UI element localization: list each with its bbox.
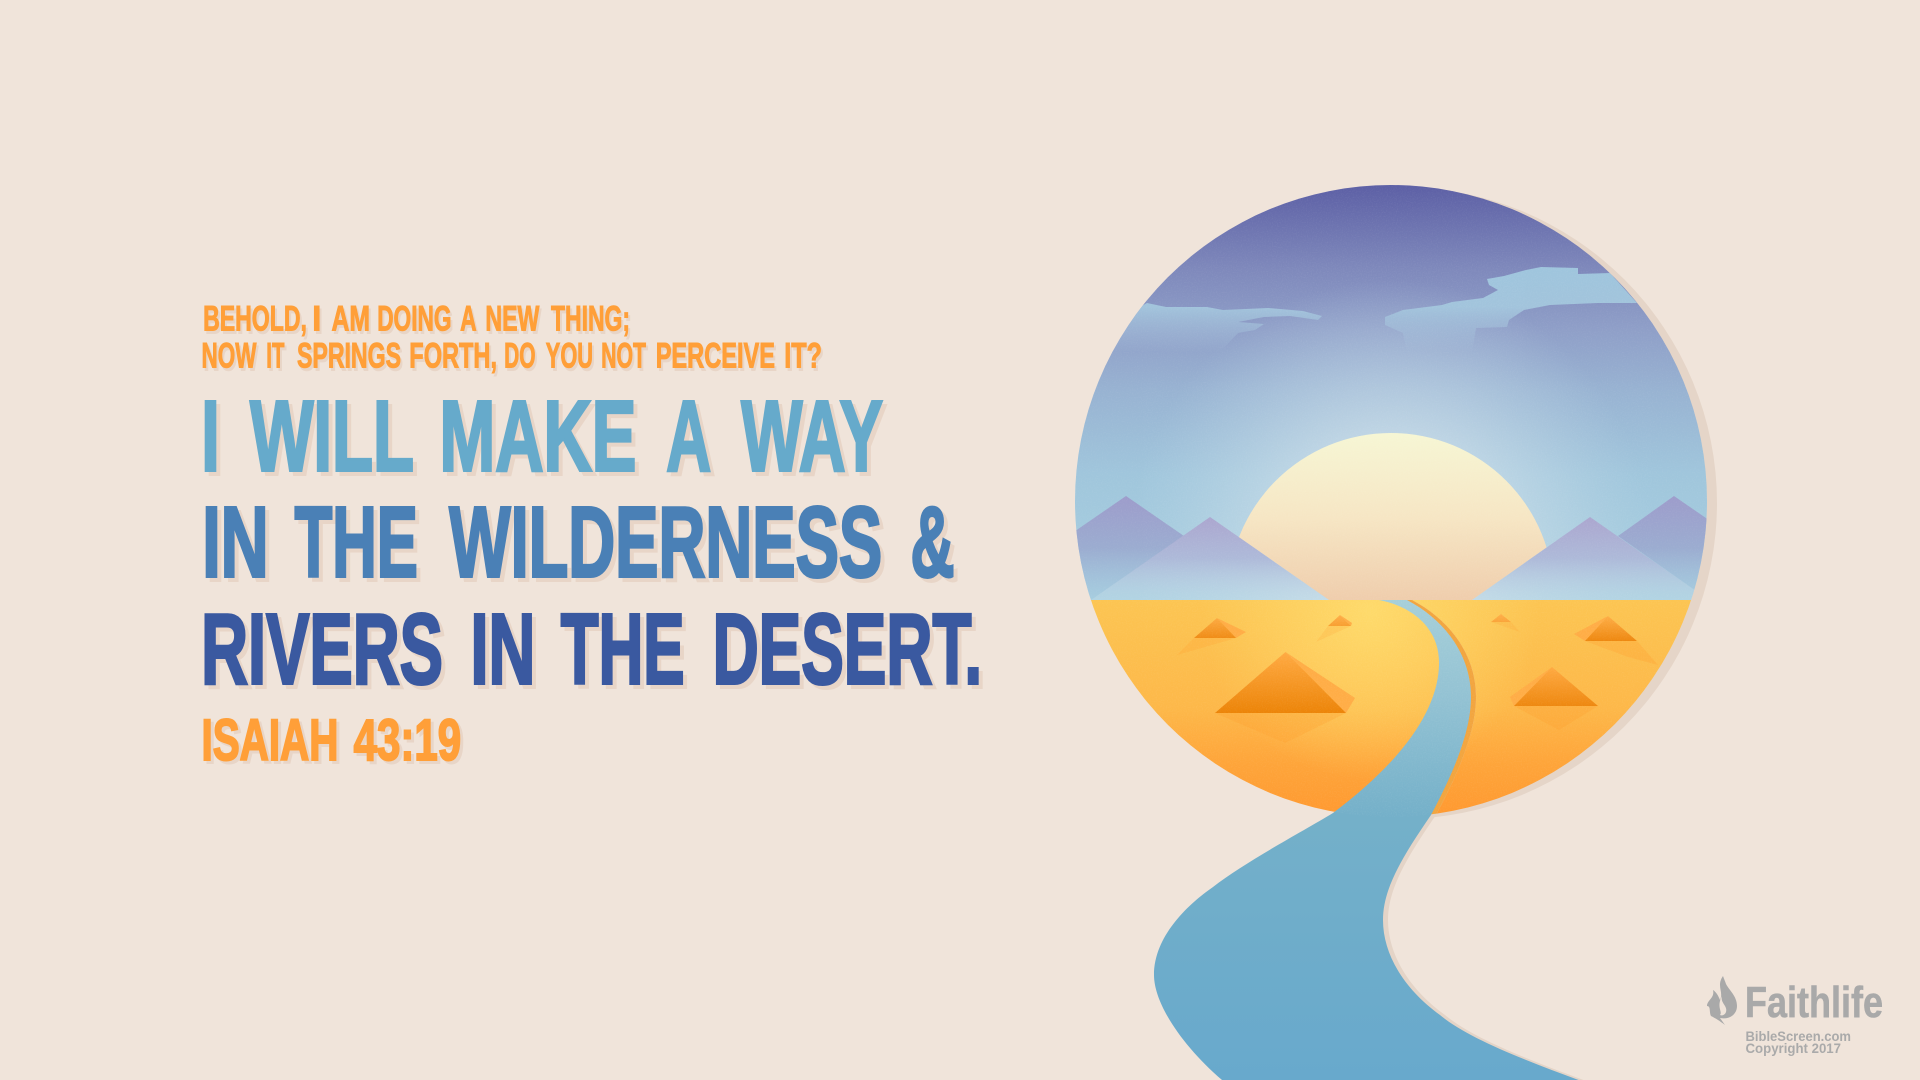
text: scripture reference: 43:19 <box>354 708 461 773</box>
text: lead-in line one: DOING <box>377 300 452 338</box>
circle shadow <box>1085 187 1717 819</box>
text: headline line two: & <box>910 486 954 598</box>
illustration: desert sunrise with river <box>1075 185 1717 1080</box>
text: lead-in line two: IT? <box>784 336 822 376</box>
pyramid: large right <box>1510 667 1598 716</box>
pyramid: upper left <box>1187 618 1246 652</box>
mountains: back range <box>1076 496 1706 600</box>
pyramid: upper right <box>1574 616 1658 665</box>
text: lead-in line two: NOW <box>202 336 256 376</box>
text: headline line three: RIVERS <box>201 594 443 706</box>
text: headline line one: A <box>666 380 710 492</box>
text: lead-in line two: DO <box>504 336 536 376</box>
river <box>1154 600 1592 1080</box>
text: headline line two: THE <box>295 486 418 598</box>
text: headline line two: WILDERNESS <box>449 486 882 598</box>
icon: flame <box>1707 976 1737 1025</box>
text: lead-in line one: A <box>460 300 476 338</box>
sun <box>1239 433 1546 600</box>
circular scene <box>1075 185 1707 814</box>
text: lead-in line one: AM <box>332 300 370 338</box>
pyramid: small left <box>1316 615 1352 642</box>
grain texture <box>1075 185 1707 817</box>
text: headline line two: IN <box>202 486 269 598</box>
pyramid: large left <box>1215 652 1355 743</box>
text: lead-in line two: FORTH, <box>409 336 497 376</box>
text: site name: BibleScreen.com <box>1746 1028 1851 1044</box>
text: lead-in line two: SPRINGS <box>297 336 401 376</box>
text: headline line one: MAKE <box>440 380 636 492</box>
text: headline line one: I <box>201 380 220 492</box>
river bank shadow in desert <box>1407 600 1476 814</box>
river bank shadow on paper <box>1159 600 1597 1080</box>
clouds <box>1120 267 1637 340</box>
desert ground <box>1075 600 1707 820</box>
mountains: front range <box>1091 517 1709 600</box>
text: lead-in line two: NOT <box>601 336 646 376</box>
text: lead-in line one: BEHOLD, <box>203 300 307 338</box>
text: lead-in line one: NEW <box>485 300 539 338</box>
text: headline line three: THE <box>561 594 685 706</box>
pyramid: small right <box>1491 614 1511 624</box>
text: headline line three: IN <box>470 594 535 706</box>
text: headline line three: DESERT. <box>713 594 982 706</box>
infographic canvas <box>202 185 1882 1080</box>
text: Faithlife wordmark: Faithlife <box>1745 978 1883 1027</box>
heading: verse text <box>201 300 982 773</box>
text: lead-in line two: YOU <box>546 336 593 376</box>
text: lead-in line one: I <box>312 300 321 338</box>
text: lead-in line two: IT <box>266 336 284 376</box>
logo: Faithlife <box>1707 976 1883 1056</box>
sky <box>1075 185 1707 601</box>
text: headline line one: WAY <box>741 380 883 492</box>
text: lead-in line two: PERCEIVE <box>656 336 775 376</box>
text: headline line one: WILL <box>250 380 413 492</box>
text: copyright: Copyright 2017 <box>1746 1040 1841 1056</box>
text: scripture reference: ISAIAH <box>202 708 338 773</box>
text: lead-in line one: THING; <box>551 300 630 338</box>
